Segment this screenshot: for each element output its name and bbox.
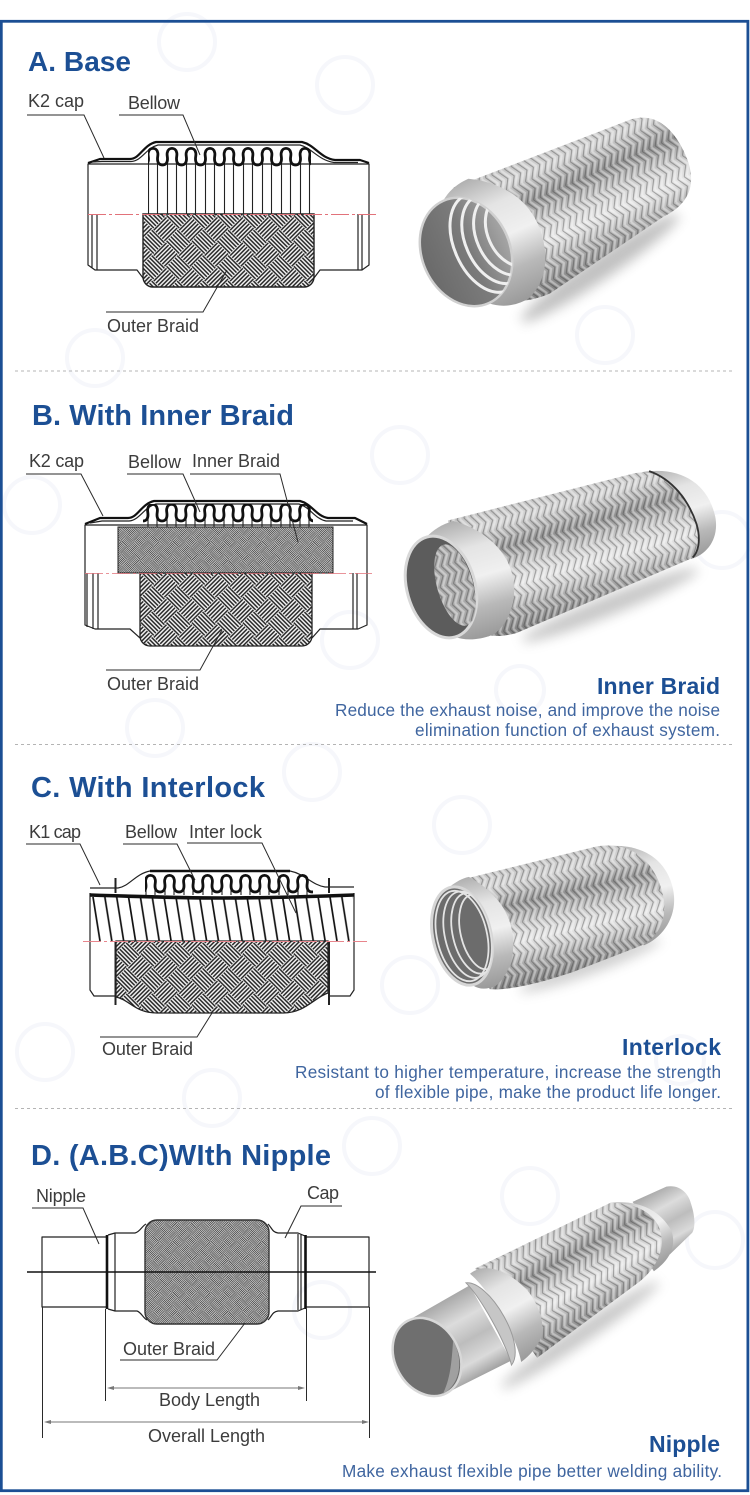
- label: K1 cap: K1 cap: [29, 822, 81, 842]
- label: Bellow: Bellow: [128, 452, 182, 472]
- panel: B. With Inner Braid: [26, 400, 731, 740]
- dimension: Overall Length: [42, 1307, 370, 1446]
- callout: Inner Braid: elimination function of exhaust system.: [415, 720, 720, 740]
- dimension: Body Length: Body Length: [159, 1390, 260, 1410]
- label: Outer Braid: Outer Braid: [107, 316, 199, 336]
- callout: Inner Braid: Reduce the exhaust noise, and improve the noise: [335, 700, 720, 720]
- label: Outer Braid: [106, 630, 222, 694]
- label: Inner Braid: Inner Braid: [192, 451, 280, 471]
- diagram: base pipe section: [88, 142, 378, 287]
- label: K2 cap: [26, 451, 103, 516]
- label: Bellow: [127, 452, 200, 512]
- label: K2 cap: K2 cap: [28, 91, 84, 111]
- label: K1 cap: [26, 822, 100, 885]
- label: Nipple: [32, 1186, 99, 1244]
- heading: D: D. (A.B.C)WIth Nipple: [31, 1140, 331, 1172]
- photo: pipe with nipple: [373, 1161, 721, 1420]
- label: Cap: Cap: [307, 1183, 339, 1203]
- photo: base pipe: [418, 118, 691, 327]
- diagram: interlock pipe section: [83, 871, 367, 1013]
- callout: Nipple: Make exhaust flexible pipe better welding ability.: [342, 1461, 722, 1481]
- label: Inter lock: [187, 822, 296, 913]
- callout: Inner Braid: [335, 673, 720, 740]
- label: Outer Braid: Outer Braid: [123, 1339, 215, 1359]
- label: Outer Braid: [120, 1323, 245, 1360]
- label: K2 cap: K2 cap: [29, 451, 84, 471]
- heading: C: C. With Interlock: [31, 772, 266, 804]
- label: Bellow: [123, 822, 195, 880]
- callout: Interlock: Resistant to higher temperature, increase the strength: [295, 1062, 721, 1082]
- label: Outer Braid: [106, 270, 227, 336]
- label: Inner Braid: [190, 451, 298, 542]
- heading: A: A. Base: [28, 46, 131, 77]
- diagram: inner braid pipe section: [85, 501, 372, 646]
- label: Outer Braid: [100, 1013, 212, 1059]
- dimension: Body Length: [106, 1309, 306, 1410]
- label: K2 cap: [27, 91, 104, 158]
- panel: A. Base: [27, 46, 715, 336]
- label: Outer Braid: Outer Braid: [107, 674, 199, 694]
- callout: Nipple: Nipple: [649, 1431, 720, 1457]
- callout: Inner Braid: Inner Braid: [597, 673, 720, 699]
- label: Inter lock: Inter lock: [189, 822, 263, 842]
- panel: C. With Interlock: [26, 772, 721, 1102]
- callout: Interlock: of flexible pipe, make the product life longer.: [375, 1082, 721, 1102]
- heading: B: B. With Inner Braid: [32, 400, 294, 432]
- label: Cap: [285, 1183, 342, 1238]
- section dividers: [15, 371, 735, 1108]
- callout: Interlock: Interlock: [622, 1034, 721, 1060]
- diagram: nipple pipe drawing: [27, 1220, 376, 1324]
- label: Bellow: Bellow: [125, 822, 178, 842]
- label: Bellow: Bellow: [128, 93, 181, 113]
- label: Bellow: [119, 93, 200, 155]
- label: Nipple: Nipple: [36, 1186, 86, 1206]
- callout: Interlock: [295, 1034, 721, 1102]
- callout: Nipple: [342, 1431, 722, 1481]
- photo: inner braid pipe: [391, 449, 731, 659]
- label: Outer Braid: Outer Braid: [102, 1039, 193, 1059]
- photo: interlock pipe: [430, 846, 674, 996]
- dimension: Overall Length: Overall Length: [148, 1426, 265, 1446]
- panel: D. (A.B.C) With Nipple: [27, 1140, 722, 1481]
